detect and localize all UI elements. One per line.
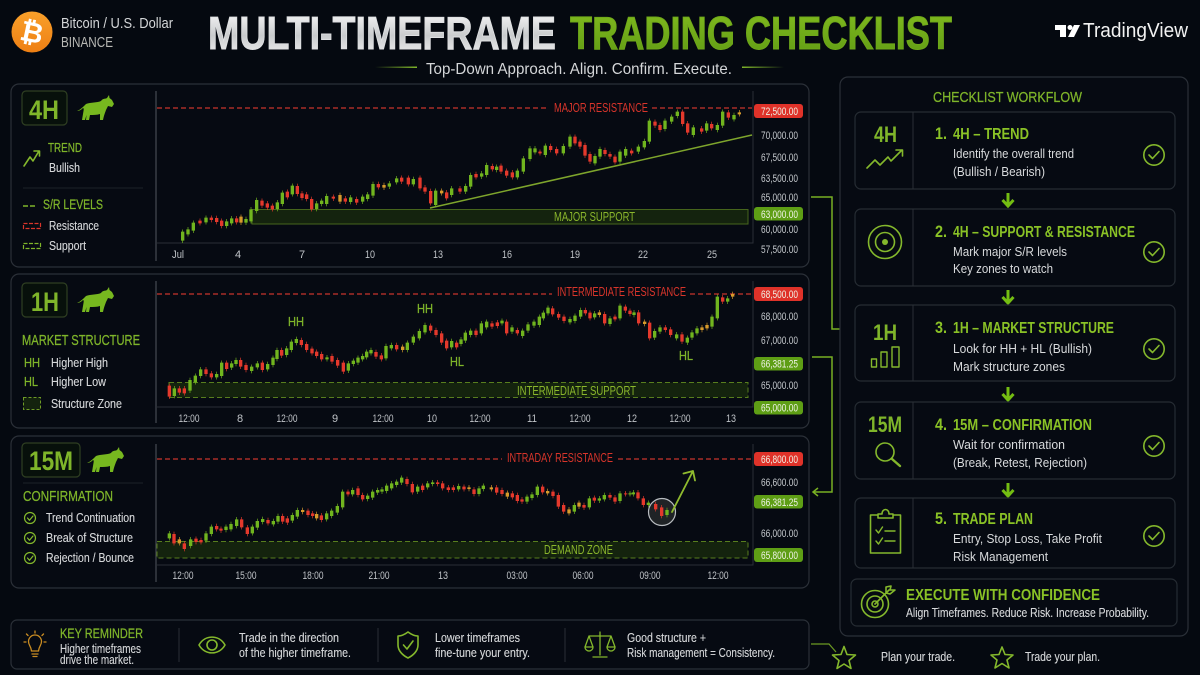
legend: HL: Higher Low	[51, 375, 107, 389]
support zone: INTERMEDIATE SUPPORT	[517, 384, 636, 398]
step 5: trade plan	[855, 498, 1175, 568]
badge 1H with bars icon: 1H	[873, 320, 897, 345]
demand zone	[157, 542, 748, 558]
price axis: 65,000.00	[761, 380, 798, 392]
swing labels	[288, 302, 693, 369]
step description: (Bullish / Bearish)	[953, 164, 1045, 179]
step description: Wait for confirmation	[953, 437, 1065, 452]
step title: 2.	[935, 222, 947, 241]
timeframe badge 4H: 4H	[29, 95, 59, 125]
time axis: 12:00	[570, 413, 590, 425]
confirmation item: rejection: Rejection / Bounce	[46, 551, 134, 565]
time axis: 12	[627, 413, 637, 425]
legend: HH: HH	[24, 355, 40, 370]
reminder: consistency: Risk management = Consistency.	[627, 646, 775, 660]
step title	[935, 318, 1114, 337]
price axis: 66,000.00	[761, 528, 798, 540]
reminder: entry: Lower timeframes	[435, 631, 520, 645]
badge 15M with magnifier	[868, 412, 902, 466]
swing labels: HH	[288, 315, 304, 329]
time axis: 16	[502, 249, 512, 261]
time axis: 12:00	[178, 413, 200, 425]
chart: 15M candlesticks	[156, 444, 803, 582]
support zone: MAJOR SUPPORT	[554, 210, 635, 224]
badge 4H with trend icon	[867, 122, 902, 168]
time axis: 11	[527, 413, 537, 425]
icon: scales	[585, 632, 615, 657]
time axis: 18:00	[302, 570, 324, 582]
reminder: direction: Trade in the direction	[239, 631, 339, 645]
timeframe badge 1H: 1H	[31, 287, 59, 317]
step 1: trend	[855, 112, 1175, 189]
candles	[183, 112, 739, 241]
step description: (Break, Retest, Rejection)	[953, 455, 1087, 470]
exchange name: BINANCE	[61, 35, 113, 51]
step title	[935, 124, 1029, 143]
arrow down	[1002, 193, 1014, 206]
title: TRADING CHECKLIST	[570, 7, 952, 59]
arrow: projected move up	[672, 471, 695, 512]
banner text: Align Timeframes. Reduce Risk. Increase Probability.	[906, 606, 1149, 620]
price tag: support: 65,000.00	[761, 402, 798, 414]
footer: trade your plan: Trade your plan.	[1025, 650, 1100, 664]
reminder heading and text: Higher timeframes	[60, 642, 141, 656]
price tag: resistance	[754, 104, 803, 118]
confirmation heading: CONFIRMATION	[23, 489, 113, 505]
icon: light bulb	[24, 631, 46, 656]
legend: HL	[24, 374, 107, 389]
price axis: 67,000.00	[761, 335, 798, 347]
market structure heading: MARKET STRUCTURE	[22, 333, 140, 349]
step title	[935, 222, 1135, 241]
key reminder bar	[11, 620, 809, 669]
step 3: market structure	[855, 305, 1175, 381]
reminder: direction	[239, 631, 351, 660]
step title: TRADE PLAN	[953, 511, 1033, 528]
arrow: 4H panel to step 3	[811, 197, 850, 333]
time axis: 12:00	[708, 570, 728, 582]
confirmation item: trend continuation	[24, 511, 135, 525]
price axis	[761, 477, 798, 540]
step title: 4H – SUPPORT & RESISTANCE	[953, 224, 1135, 241]
icon: target with arrow	[862, 586, 895, 618]
icon: bull	[77, 95, 114, 120]
candles	[169, 294, 733, 397]
step description: Risk Management	[953, 549, 1048, 564]
step 4: confirmation	[855, 402, 1175, 479]
price axis	[761, 130, 798, 256]
legend: structure zone	[24, 397, 122, 411]
time axis: 13	[726, 413, 736, 425]
price axis: 57,500.00	[761, 244, 798, 256]
time axis: 13	[438, 570, 448, 582]
candles	[169, 478, 667, 549]
time axis: 19	[570, 249, 580, 261]
step title: 15M – CONFIRMATION	[953, 417, 1092, 434]
footer: plan your trade	[811, 644, 955, 668]
confirmation heading	[23, 483, 143, 505]
step title: 1H – MARKET STRUCTURE	[953, 320, 1114, 337]
price tag: demand: 65,800.00	[761, 550, 798, 562]
price tag: support	[754, 207, 803, 221]
subtitle: Top-Down Approach. Align. Confirm. Execute.	[426, 61, 732, 78]
reminder heading and text: drive the market.	[60, 653, 134, 667]
icon: clipboard	[870, 510, 900, 553]
arrow down	[1002, 290, 1014, 303]
time axis: 12:00	[276, 413, 298, 425]
time axis: 25	[707, 249, 717, 261]
step title	[935, 415, 1092, 434]
resistance line: MAJOR RESISTANCE	[554, 101, 648, 115]
price axis: 70,000.00	[761, 130, 798, 142]
time axis	[178, 413, 736, 425]
time axis	[172, 570, 728, 582]
step title: 3.	[935, 318, 947, 337]
execute banner	[851, 579, 1177, 626]
price tag: current	[754, 495, 803, 509]
badge 15M with magnifier: 15M	[868, 412, 902, 437]
trend value: Bullish	[49, 161, 80, 175]
footer: plan your trade: Plan your trade.	[881, 650, 955, 664]
workflow heading: CHECKLIST WORKFLOW	[933, 89, 1083, 106]
reminder heading and text: KEY REMINDER	[60, 626, 143, 641]
step description	[953, 531, 1102, 564]
chart: 4H candlesticks	[156, 91, 803, 261]
time axis: 12:00	[670, 413, 690, 425]
asset name: Bitcoin / U.S. Dollar	[61, 16, 173, 32]
trend line	[430, 135, 752, 208]
reminder: entry	[435, 631, 530, 660]
badge 4H with trend icon: 4H	[874, 122, 897, 147]
price tag: resistance	[754, 287, 803, 301]
support zone	[252, 210, 748, 224]
confirmation item: trend continuation: Trend Continuation	[46, 511, 135, 525]
time axis: 03:00	[506, 570, 528, 582]
step description	[953, 341, 1092, 374]
price tag: current: 66,381.25	[761, 358, 798, 370]
banner heading: EXECUTE WITH CONFIDENCE	[906, 587, 1100, 604]
title	[208, 7, 952, 59]
price axis: 65,000.00	[761, 192, 798, 204]
icon: bitcoin coin: ₿	[17, 14, 46, 51]
demand zone: DEMAND ZONE	[544, 543, 613, 557]
reminder heading and text	[60, 626, 143, 667]
step description: Mark major S/R levels	[953, 244, 1067, 259]
reminder: consistency	[627, 631, 775, 660]
step description: Mark structure zones	[953, 359, 1065, 374]
S/R legend: S/R LEVELS	[43, 197, 103, 212]
swing labels: HH	[417, 302, 433, 316]
step title: 4.	[935, 415, 947, 434]
price tag: resistance: 68,500.00	[761, 289, 798, 301]
badge 1H with bars icon	[872, 320, 899, 367]
arrow down	[1002, 387, 1014, 400]
panel: 1H structure	[11, 274, 809, 428]
icon: target	[868, 226, 902, 258]
step description	[953, 244, 1067, 276]
panel: 15M confirmation	[11, 436, 809, 588]
icon: bull	[77, 287, 114, 312]
header: asset	[12, 12, 173, 52]
check icon	[1144, 145, 1164, 165]
time axis: 12:00	[470, 413, 490, 425]
time axis: 21:00	[368, 570, 390, 582]
price axis: 66,600.00	[761, 477, 798, 489]
price axis: 63,500.00	[761, 173, 798, 185]
step title: 5.	[935, 509, 947, 528]
confirmation item: break of structure: Break of Structure	[46, 531, 133, 545]
icon: bitcoin coin	[12, 12, 52, 52]
S/R legend	[23, 188, 143, 253]
price tag: demand	[754, 548, 803, 562]
time axis	[172, 249, 717, 261]
icon: trend arrow	[24, 151, 40, 166]
support zone	[169, 382, 748, 398]
arrow: 1H panel to 15M panel	[812, 357, 832, 496]
step description: Look for HH + HL (Bullish)	[953, 341, 1092, 356]
step description: Entry, Stop Loss, Take Profit	[953, 531, 1102, 546]
check icon	[1144, 436, 1164, 456]
time axis: 4	[235, 249, 241, 261]
price axis: 68,000.00	[761, 311, 798, 323]
time axis: 10	[365, 249, 375, 261]
price tag: support: 63,000.00	[761, 209, 798, 221]
price tag: resistance	[754, 452, 803, 466]
step 2: support and resistance	[855, 209, 1175, 286]
arrow down	[1002, 483, 1014, 496]
reminder: consistency: Good structure +	[627, 631, 706, 645]
step description: Identify the overall trend	[953, 146, 1074, 161]
time axis: 10	[427, 413, 437, 425]
price axis: 60,000.00	[761, 224, 798, 236]
time axis: 06:00	[572, 570, 594, 582]
check icon	[1144, 526, 1164, 546]
swing labels: HL	[679, 349, 693, 363]
panel: 4H trend	[11, 84, 809, 267]
timeframe badge 15M: 15M	[29, 446, 73, 476]
trend label: TREND	[48, 140, 82, 155]
reminder: direction: of the higher timeframe.	[239, 646, 351, 660]
price tag: resistance: 72,500.00	[761, 106, 798, 118]
legend: structure zone: Structure Zone	[51, 397, 122, 411]
time axis: 12:00	[172, 570, 194, 582]
panel: checklist workflow	[840, 77, 1188, 636]
time axis: 12:00	[372, 413, 394, 425]
timeframe badge 4H	[22, 91, 67, 125]
check icon	[1144, 339, 1164, 359]
price tag: support	[754, 401, 803, 414]
chart: 1H candlesticks	[156, 281, 803, 425]
time axis: 13	[433, 249, 443, 261]
footer: trade your plan	[991, 647, 1100, 668]
step description: Key zones to watch	[953, 261, 1053, 276]
step title	[935, 509, 1033, 528]
title: MULTI-TIMEFRAME	[208, 7, 556, 59]
step description	[953, 146, 1074, 179]
S/R legend: Resistance	[49, 219, 99, 233]
icon: bull	[87, 447, 124, 472]
resistance line: INTERMEDIATE RESISTANCE	[557, 285, 686, 299]
timeframe badge 1H	[22, 283, 67, 317]
swing labels: HL	[450, 355, 464, 369]
legend: HL: HL	[24, 374, 38, 389]
time axis: 22	[638, 249, 648, 261]
time axis: 7	[299, 249, 305, 261]
time axis: 15:00	[236, 570, 256, 582]
TradingView logo: TradingView	[1083, 20, 1189, 42]
time axis: 9	[332, 413, 338, 425]
step description	[953, 437, 1087, 470]
resistance line: INTRADAY RESISTANCE	[507, 451, 613, 465]
price axis	[761, 311, 798, 392]
time axis: 8	[237, 413, 243, 425]
icon: eye	[199, 637, 225, 653]
price axis: 67,500.00	[761, 152, 798, 164]
S/R legend: Support	[49, 239, 86, 253]
check icon	[1144, 242, 1164, 262]
icon: shield	[398, 632, 418, 658]
reminder: entry: fine-tune your entry.	[435, 646, 530, 660]
step title: 4H – TREND	[953, 126, 1029, 143]
time axis: 09:00	[640, 570, 660, 582]
price tag: resistance: 66,800.00	[761, 454, 798, 466]
reversal highlight circle	[648, 498, 676, 526]
price tag: current: 66,381.25	[761, 497, 798, 509]
time axis: Jul	[172, 249, 184, 261]
confirmation item: rejection	[24, 551, 134, 565]
legend: HH: Higher High	[51, 356, 108, 370]
price tag: current	[754, 357, 803, 370]
step title: 1.	[935, 124, 947, 143]
legend: HH	[24, 355, 108, 370]
